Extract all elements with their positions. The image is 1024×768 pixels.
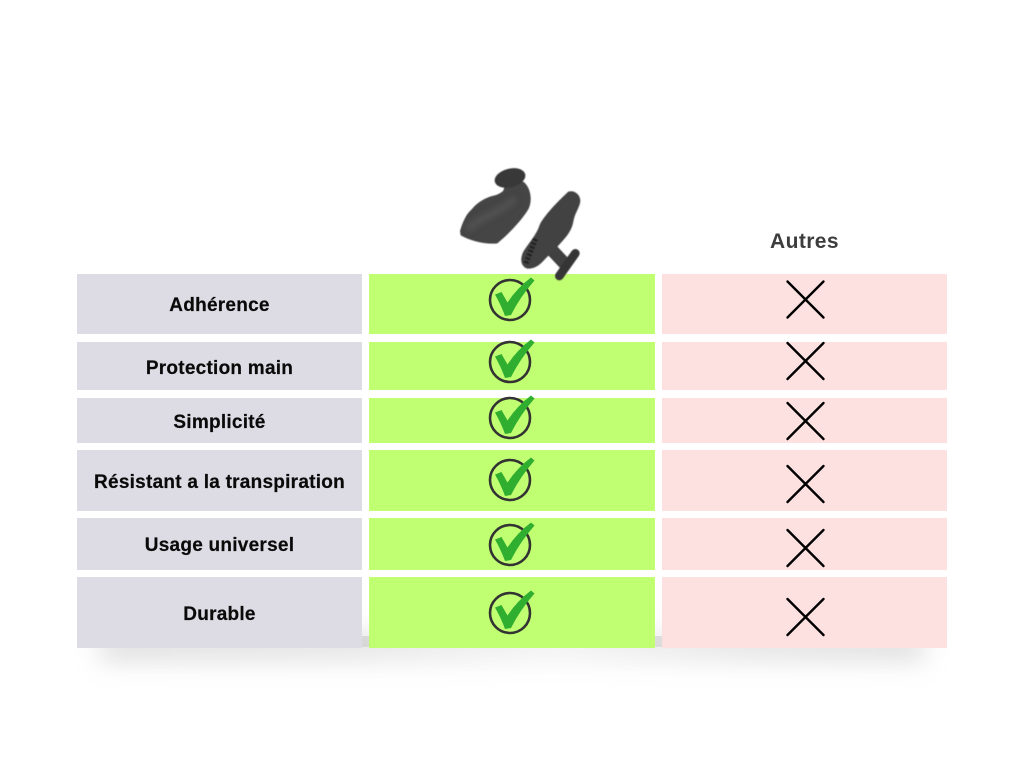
icon: check row 6 <box>490 590 534 633</box>
row 6: Durable: Durable <box>183 604 256 625</box>
row 4: Résistant a la transpiration: Résistant a la transpiration <box>94 472 345 493</box>
icon: cross row 5 <box>788 530 824 566</box>
row 4: Résistant a la transpiration <box>77 450 947 511</box>
row 5: Usage universel <box>77 518 947 570</box>
row 3: Simplicité <box>77 398 947 443</box>
left grip piece <box>460 165 531 244</box>
row 3: Simplicité: Simplicité <box>173 412 266 433</box>
icon: cross row 6 <box>788 599 824 635</box>
row 5: Usage universel: Usage universel <box>145 535 294 556</box>
column heading: Autres: Autres <box>770 230 839 253</box>
icon: check row 1 <box>490 278 534 320</box>
icon: check row 5 <box>490 522 534 565</box>
row 1: Adhérence: Adhérence <box>169 295 270 316</box>
table drop shadow <box>94 627 930 670</box>
row 1: Adhérence <box>77 274 947 334</box>
icon: check row 3 <box>490 396 534 438</box>
product image: two dark grip pieces <box>459 167 582 282</box>
icon: check row 2 <box>490 340 534 382</box>
row 2: Protection main <box>77 342 947 390</box>
row 2: Protection main: Protection main <box>146 358 293 379</box>
right grip piece <box>521 191 580 276</box>
icon: cross row 2 <box>788 343 824 379</box>
icon: cross row 1 <box>788 282 824 318</box>
icon: cross row 4 <box>788 466 824 502</box>
icon: check row 4 <box>490 458 534 500</box>
icon: cross row 3 <box>788 403 824 439</box>
